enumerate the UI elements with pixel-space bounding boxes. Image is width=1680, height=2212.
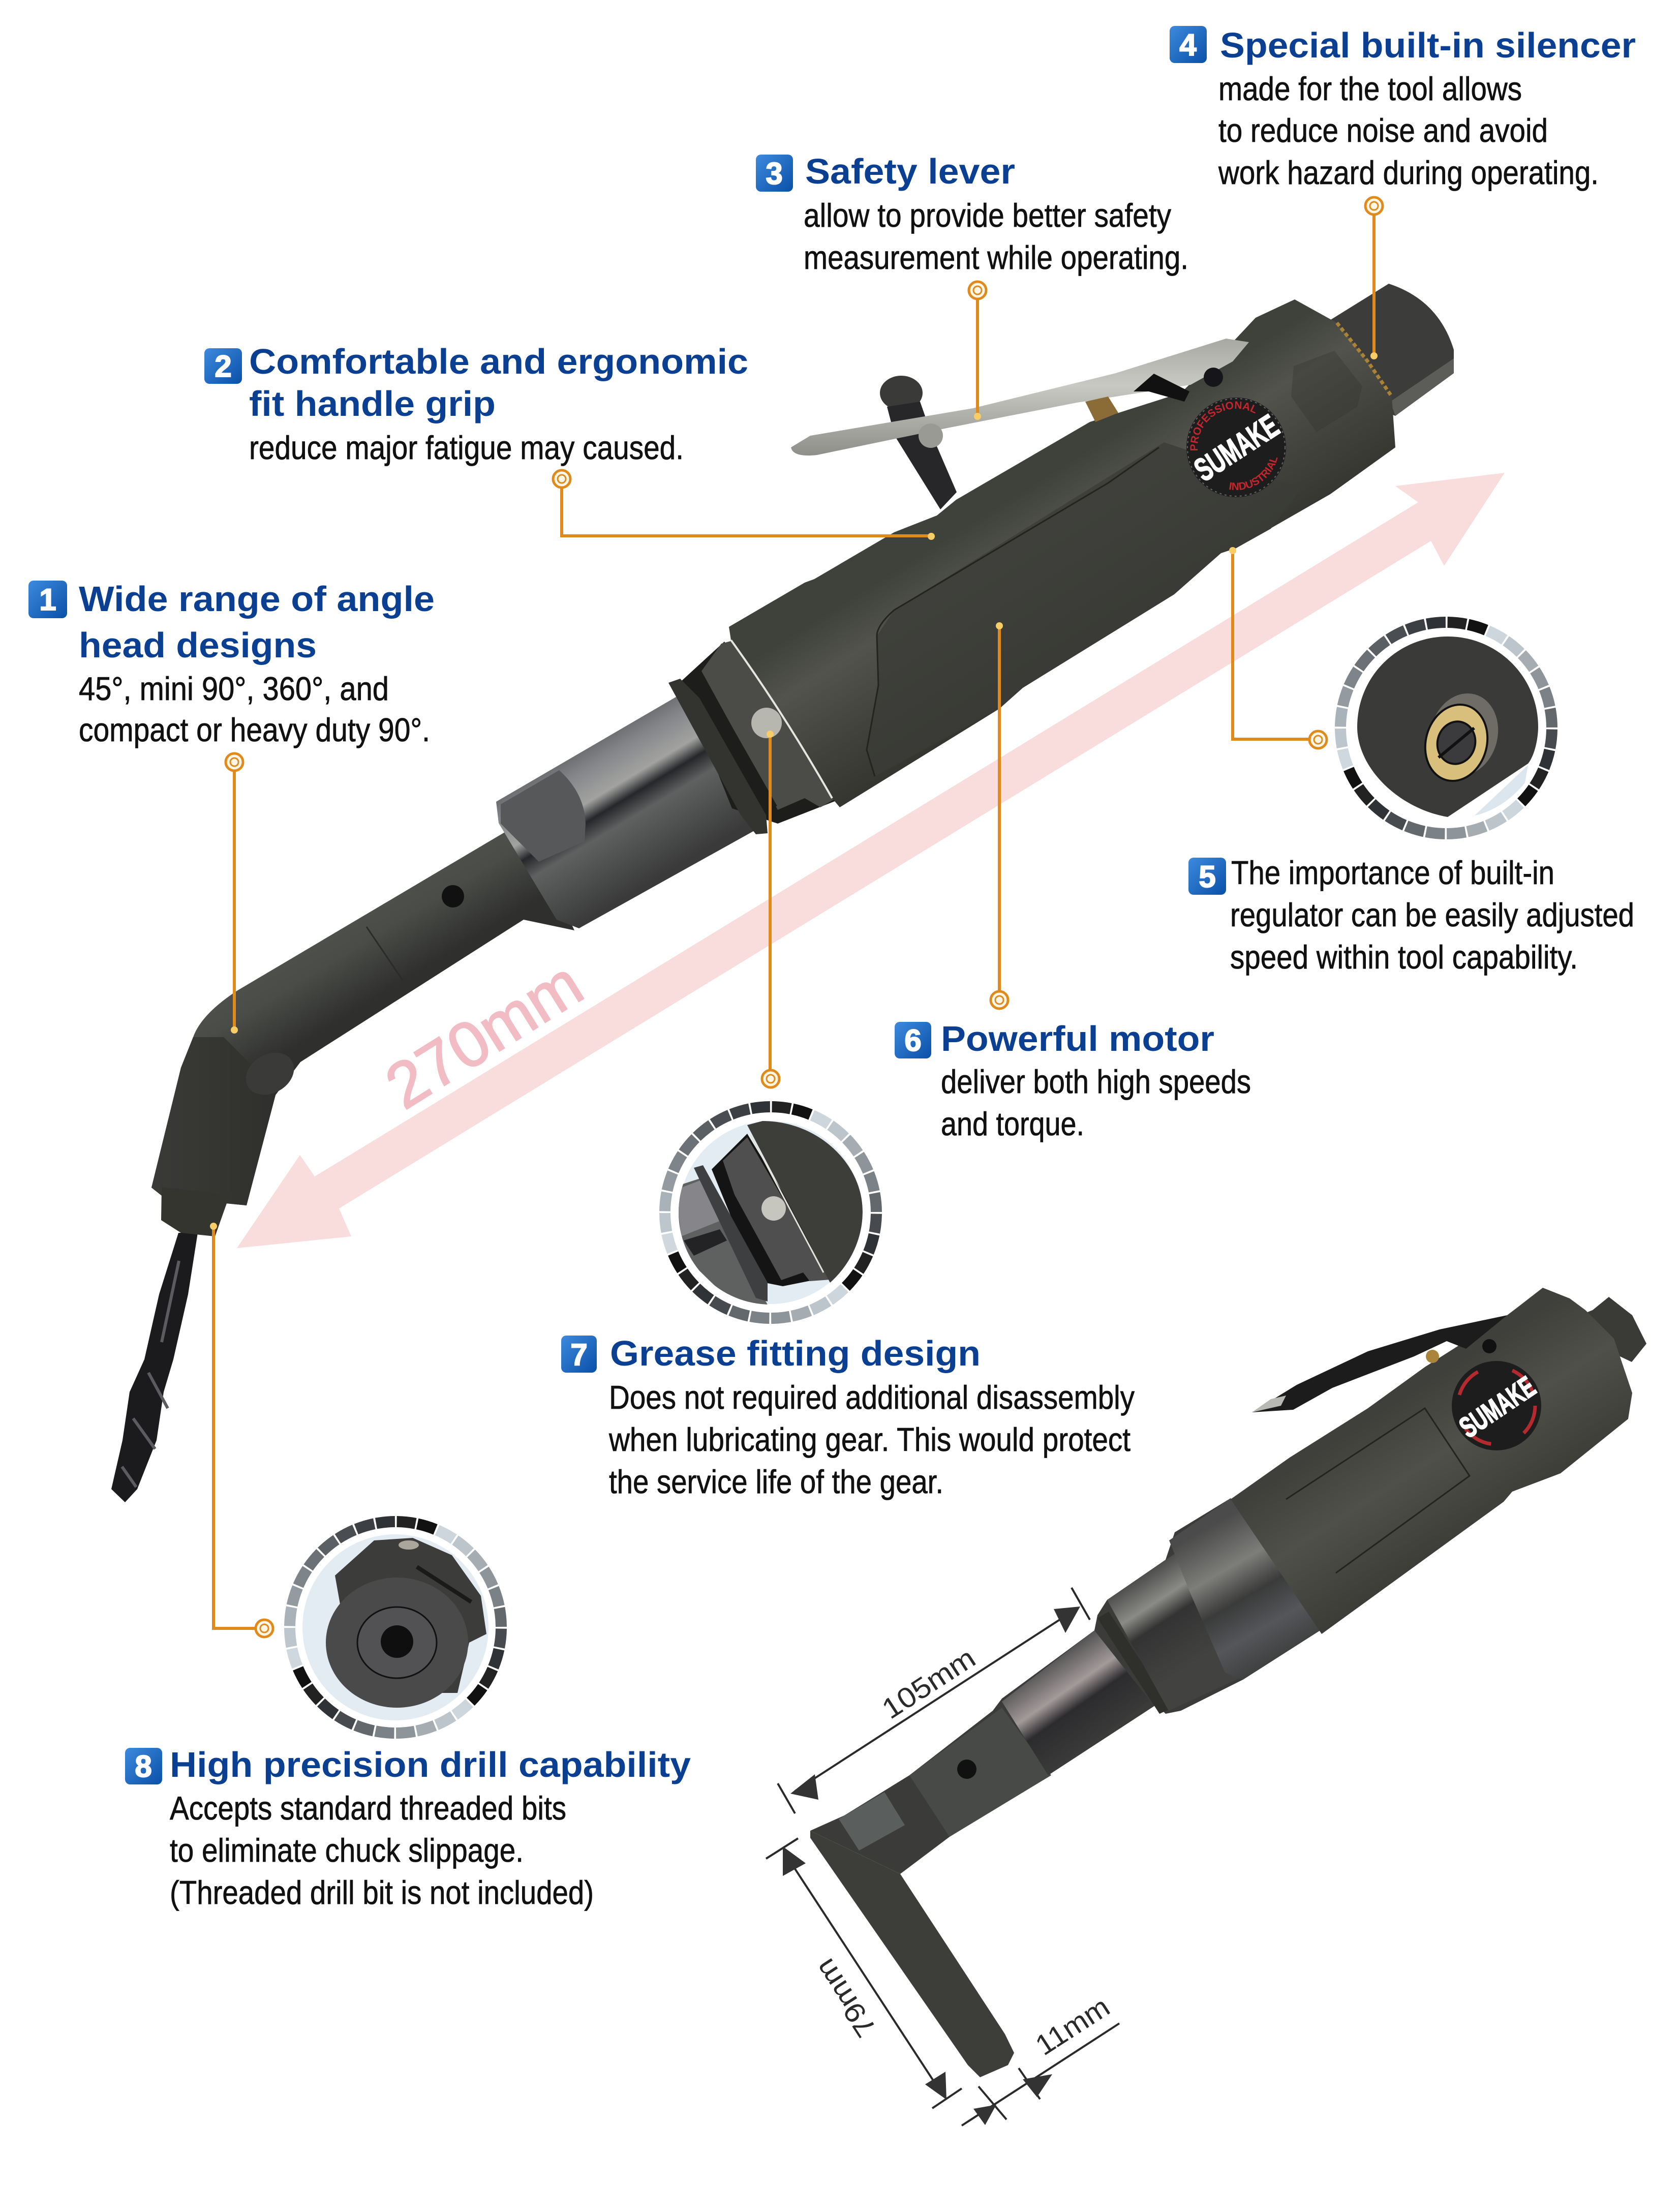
neck — [723, 1137, 830, 1281]
main body — [729, 299, 1395, 807]
dimension: 11mm — [962, 1990, 1119, 2126]
fitting light backdrop — [679, 1121, 862, 1304]
chuck screw — [399, 1540, 419, 1550]
callout 4: silencer — [1170, 25, 1636, 191]
leader lines and dots — [210, 197, 1383, 1637]
chuck face — [326, 1578, 468, 1708]
lever pin — [1204, 368, 1223, 387]
badge 2 — [204, 348, 242, 384]
badge 8 — [125, 1748, 162, 1784]
body 4: made for the tool allows — [1218, 70, 1522, 107]
body — [747, 1121, 863, 1283]
body 8: Accepts standard threaded bits — [170, 1790, 566, 1827]
chuck light backdrop — [302, 1534, 488, 1720]
rear panel — [1291, 351, 1362, 432]
body 7 — [608, 1379, 1135, 1500]
shaft hole — [442, 885, 464, 907]
callout 8: drill capability — [125, 1745, 691, 1911]
head shine — [839, 1792, 905, 1851]
heading 8: High precision drill capability — [170, 1745, 691, 1784]
white seam — [751, 1135, 823, 1272]
wrench flat — [501, 770, 586, 862]
cylinder — [674, 1178, 769, 1307]
regulator silver backing — [1421, 686, 1507, 783]
shaft and angled head — [151, 821, 574, 1205]
grip panel — [867, 442, 1301, 776]
chuck inner ring — [357, 1607, 437, 1678]
fitting body crop — [674, 1121, 863, 1307]
heading 2: Comfortable and ergonomic — [249, 342, 748, 381]
leader 4 — [1365, 197, 1383, 359]
heading 3: Safety lever — [805, 151, 1015, 191]
regulator brass ring — [1417, 698, 1496, 788]
flange — [668, 679, 768, 834]
regulator shadow background — [1464, 765, 1528, 817]
arrow: 270mm overall length — [237, 473, 1505, 1248]
logo brand: SUMAKE — [1453, 1370, 1542, 1444]
chrome cylinder — [1002, 1630, 1150, 1775]
inset: built-in regulator — [1297, 579, 1596, 877]
drill bit — [111, 1233, 198, 1502]
inset: drill chuck face — [246, 1478, 545, 1777]
tool silhouette underlay — [810, 1498, 1320, 1874]
L head — [810, 1831, 1014, 2077]
badge 4: 4 — [1179, 28, 1197, 62]
logo badge — [1186, 398, 1286, 497]
secondary tool view with dimensions — [766, 1288, 1646, 2126]
body 3: measurement while operating. — [804, 239, 1188, 276]
badge 5: 5 — [1199, 860, 1216, 894]
regulator body — [1357, 637, 1538, 817]
badge 3: 3 — [766, 157, 783, 191]
dimension: 79mm: 79mm — [808, 1953, 882, 2043]
regulator screw — [1432, 717, 1480, 768]
logo red ring — [1458, 1367, 1535, 1444]
logo bottom line: INDUSTRIAL — [1229, 458, 1278, 490]
badge 5 — [1188, 858, 1226, 895]
leader 7 — [762, 731, 779, 1087]
callout 7: grease fitting — [561, 1334, 1135, 1500]
flange — [694, 1165, 768, 1301]
white seam line — [731, 640, 832, 798]
neck underlay — [712, 1134, 815, 1286]
shaft hole — [957, 1760, 976, 1779]
cylinder dark band — [684, 1229, 727, 1256]
body 4: to reduce noise and avoid — [1218, 112, 1548, 149]
body 7: the service life of the gear. — [609, 1463, 943, 1500]
body 6 — [941, 1063, 1251, 1142]
label: 270mm: 270mm — [374, 947, 595, 1123]
silencer brass ring — [1337, 323, 1392, 397]
logo brand: SUMAKE — [1188, 407, 1285, 489]
leader 8 — [210, 1223, 273, 1637]
dimension: 105mm — [778, 1588, 1090, 1813]
hexagonal gear housing — [496, 694, 762, 928]
neck underlay — [681, 642, 836, 824]
body 8: (Threaded drill bit is not included) — [170, 1874, 594, 1911]
body 5: speed within tool capability. — [1230, 938, 1578, 976]
callout 1: angle head designs — [28, 579, 435, 748]
chuck groove — [417, 1567, 471, 1602]
regulator slot — [1439, 728, 1474, 757]
dimension: 11mm: 11mm — [1029, 1990, 1115, 2062]
grip panel outline — [1286, 1408, 1470, 1573]
lever pin — [1482, 1339, 1496, 1353]
heading 6: Powerful motor — [941, 1019, 1214, 1058]
badge 1 — [28, 581, 67, 618]
body 5 — [1230, 854, 1634, 976]
body 8 — [170, 1790, 594, 1911]
body 6: deliver both high speeds — [941, 1063, 1251, 1100]
wide collar — [1169, 1498, 1320, 1680]
body 2: reduce major fatigue may caused. — [249, 429, 684, 466]
heading 1: Wide range of angle — [79, 579, 435, 619]
rear body — [1231, 1288, 1632, 1634]
heading 2: fit handle grip — [249, 384, 496, 423]
leader 6 — [991, 622, 1008, 1009]
badge 1: 1 — [39, 583, 56, 617]
lever — [1252, 1315, 1507, 1412]
body 4: work hazard during operating. — [1218, 154, 1599, 191]
body 6: and torque. — [941, 1105, 1084, 1142]
body 8: to eliminate chuck slippage. — [170, 1832, 524, 1869]
callout 3: safety lever — [756, 151, 1188, 276]
dimension: 79mm — [766, 1838, 962, 2108]
latch pivot — [919, 423, 943, 448]
leader 2 — [553, 470, 935, 540]
heading 1 — [79, 579, 435, 665]
exhaust hex — [1322, 284, 1454, 416]
logo badge — [1452, 1361, 1542, 1450]
body 5: The importance of built-in — [1231, 854, 1554, 891]
shaft — [909, 1708, 1051, 1837]
chuck threaded hole — [381, 1625, 413, 1658]
main tool: angle drill — [111, 281, 1474, 1518]
grease fitting screw — [751, 708, 782, 738]
grip panel outline — [867, 447, 1159, 776]
logo arc lettering — [1190, 401, 1278, 490]
callout 6: motor — [895, 1019, 1251, 1142]
badge 7 — [561, 1336, 597, 1373]
body 1: compact or heavy duty 90°. — [79, 711, 430, 748]
heading 1: head designs — [79, 625, 317, 665]
leader 3 — [969, 282, 986, 420]
leader 5 — [1229, 547, 1327, 748]
badge 7: 7 — [570, 1338, 588, 1372]
inset: grease fitting — [659, 1101, 882, 1324]
lever brass stem — [1085, 397, 1118, 422]
lever silver tip — [1252, 1396, 1286, 1412]
screw — [761, 1196, 786, 1221]
stepped collar — [1107, 1551, 1240, 1711]
body 1 — [79, 670, 430, 748]
body 4 — [1218, 70, 1599, 191]
heading 4: Special built-in silencer — [1220, 25, 1636, 65]
callout 5: regulator — [1188, 854, 1634, 976]
exhaust — [1576, 1297, 1646, 1362]
logo top line: PROFESSIONAL — [1190, 401, 1256, 450]
cylinder highlight — [679, 1180, 719, 1236]
neck — [701, 640, 836, 810]
body 1: 45°, mini 90°, 360°, and — [79, 670, 389, 707]
badge 8: 8 — [135, 1749, 152, 1783]
lever support — [1134, 374, 1189, 402]
badge 2: 2 — [215, 349, 232, 383]
body 7: Does not required additional disassembly — [609, 1379, 1135, 1416]
trigger lever — [791, 339, 1249, 456]
badge 4 — [1170, 26, 1207, 63]
body 3: allow to provide better safety — [804, 197, 1171, 234]
shaft seam — [366, 927, 403, 980]
heading 2 — [249, 342, 748, 423]
safety latch — [880, 376, 957, 509]
callout 2: ergonomic grip — [204, 342, 748, 466]
heading 7: Grease fitting design — [610, 1334, 981, 1373]
dimension: 105mm: 105mm — [876, 1642, 981, 1725]
head knob — [238, 1044, 301, 1103]
leader 1 — [226, 753, 243, 1034]
body 7: when lubricating gear. This would protect — [608, 1421, 1131, 1458]
chuck collar — [161, 1187, 230, 1236]
lever brass stem — [1426, 1350, 1439, 1363]
neck groove — [697, 676, 773, 808]
body 3 — [804, 197, 1188, 276]
badge 3 — [756, 155, 793, 192]
chuck rear body — [335, 1538, 486, 1693]
badge 6: 6 — [904, 1023, 922, 1057]
flange — [1097, 1612, 1172, 1714]
angled head — [151, 1037, 276, 1205]
badge 6 — [895, 1022, 931, 1058]
